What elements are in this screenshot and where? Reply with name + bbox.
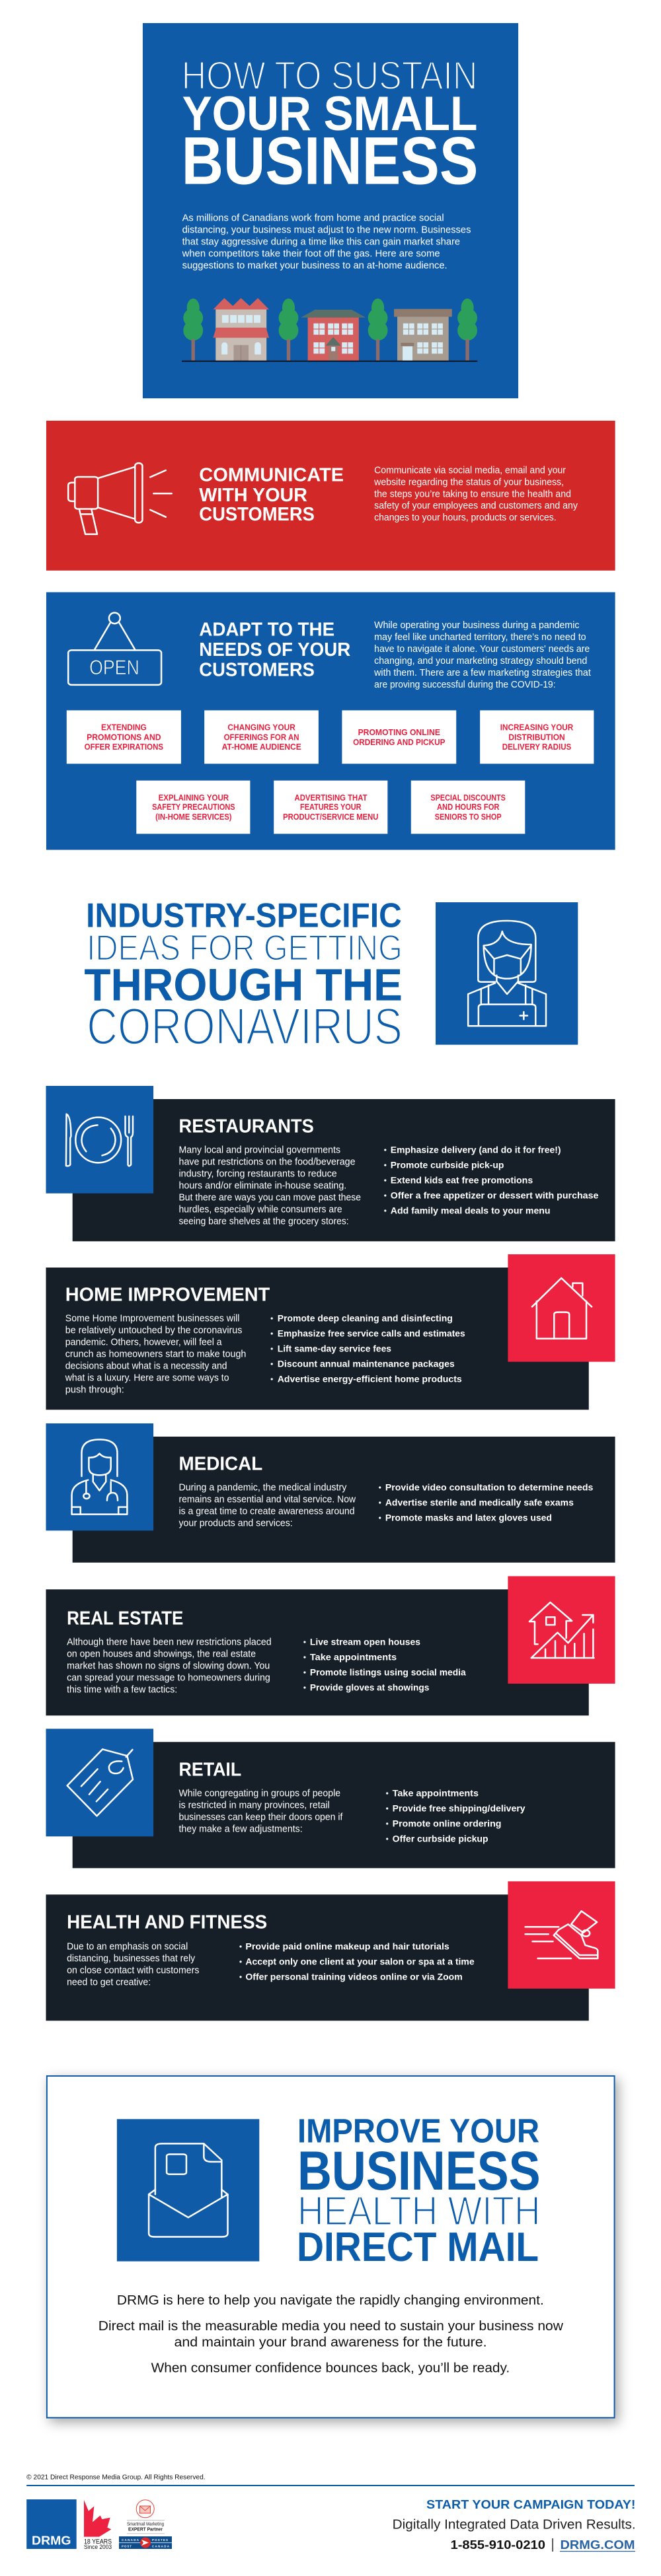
strategy card: extending promotions: EXTENDING [101, 723, 147, 733]
heading: HEALTH AND FITNESS [67, 1912, 267, 1933]
badge: 18 years maple leaf [84, 2500, 112, 2551]
strategy card: online ordering: ORDERING AND PICKUP [353, 738, 445, 747]
heading: BUSINESS [297, 2139, 541, 2201]
strategy card: changing offerings: AT-HOME AUDIENCE [222, 742, 301, 752]
body text: Due to an emphasis on social [67, 1941, 188, 1952]
heading [297, 2112, 541, 2270]
body text: this time with a few tactics: [67, 1684, 177, 1695]
heading: DIRECT MAIL [297, 2225, 539, 2270]
strategy card: changing offerings [204, 710, 319, 764]
intro text [182, 213, 471, 271]
strategy card: distribution radius: DELIVERY RADIUS [502, 742, 571, 752]
bullet list [271, 1313, 465, 1384]
icon: woman wearing mask [436, 902, 578, 1045]
body text: businesses can keep their doors open if [178, 1812, 343, 1822]
body text [373, 620, 591, 690]
body text: remains an essential and vital service. Now [178, 1494, 356, 1505]
heading: industry-specific ideas: CORONAVIRUS [87, 999, 403, 1055]
icon: direct mail envelope [117, 2119, 259, 2262]
heading: industry-specific ideas [84, 896, 403, 1055]
strategy card: advertising: FEATURES YOUR [300, 803, 362, 812]
bullet list [303, 1637, 466, 1692]
title: HOW TO SUSTAIN [182, 53, 477, 98]
closing text [98, 2293, 564, 2375]
heading: ADAPT TO THE [199, 620, 334, 641]
heading: REAL ESTATE [67, 1608, 183, 1629]
badge: smartmail marketing expert [127, 2500, 165, 2534]
heading [199, 620, 350, 680]
bullet list: Provide paid online makeup and hair tutorials [245, 1941, 449, 1951]
body text: they make a few adjustments: [178, 1824, 303, 1834]
badge: smartmail marketing expert: EXPERT Partner [128, 2527, 163, 2532]
bullet list: Provide video consultation to determine needs [385, 1482, 593, 1492]
strategy card: safety precautions: SAFETY PRECAUTIONS [152, 803, 235, 812]
heading: CUSTOMERS [199, 659, 315, 680]
bullet list: Promote masks and latex gloves used [385, 1513, 552, 1522]
bullet list: Provide free shipping/delivery [393, 1803, 525, 1813]
body text: While congregating in groups of people [178, 1788, 340, 1799]
closing text: Direct mail is the measurable media you need to sustain your business now [98, 2319, 564, 2334]
body text: is restricted in many provinces, retail [178, 1800, 330, 1810]
strategy card: online ordering [342, 710, 456, 764]
call to action: 1-855-910-0210 [451, 2538, 545, 2552]
strategy card: extending promotions [67, 710, 181, 764]
footer [26, 2474, 636, 2552]
body text: seeing bare shelves at the grocery stores: [178, 1216, 349, 1227]
strategy card: extending promotions: PROMOTIONS AND [87, 733, 161, 742]
body text: what is a luxury. Here are some ways to [65, 1373, 229, 1383]
body text: changing, and your marketing strategy should bend [374, 656, 587, 666]
icon: price tag [67, 1749, 133, 1816]
bullet list: Extend kids eat free promotions [391, 1175, 533, 1185]
body text: need to get creative: [67, 1977, 151, 1987]
heading [199, 464, 344, 525]
strategy card: distribution radius [480, 710, 594, 764]
badge: canada post: POST [122, 2544, 132, 2548]
bullet list: Lift same-day service fees [278, 1343, 391, 1353]
panel: adapt to the needs of your customers [46, 592, 615, 850]
body text: website regarding the status of your business, [373, 477, 564, 487]
strategy card: extending promotions: OFFER EXPIRATIONS [85, 742, 163, 752]
body text: hours and/or eliminate in-house seating. [178, 1180, 346, 1191]
body text: While operating your business during a pandemic [374, 620, 579, 631]
body text [67, 1941, 199, 1987]
strategy card: seniors: AND HOURS FOR [437, 803, 500, 812]
bullet list [379, 1482, 593, 1522]
title: BUSINESS [182, 123, 478, 199]
body text: But there are ways you can move past these [178, 1192, 361, 1203]
closing text: When consumer confidence bounces back, you’ll be ready. [151, 2361, 510, 2375]
body text: have put restrictions on the food/beverage [178, 1157, 356, 1167]
intro text: that stay aggressive during a time like this can gain market share [182, 237, 460, 248]
body text [178, 1482, 356, 1528]
strategy card: changing offerings: OFFERINGS FOR AN [224, 733, 299, 742]
body text: distancing, businesses that rely [67, 1953, 196, 1964]
body text: crunch as homeowners start to make tough [65, 1349, 246, 1359]
body text: with them. There are a few marketing strategies that [373, 668, 591, 678]
bullet list: Take appointments [310, 1652, 397, 1662]
bullet list: Advertise sterile and medically safe exams [385, 1497, 574, 1507]
body text: push through: [65, 1384, 124, 1395]
body text: decisions about what is a necessity and [65, 1361, 227, 1371]
heading: CUSTOMERS [199, 504, 315, 525]
bullet list: Promote deep cleaning and disinfecting [278, 1313, 453, 1323]
icon: house [532, 1278, 592, 1339]
bullet list: Offer a free appetizer or dessert with purchase [391, 1190, 599, 1200]
body text: safety of your employees and customers and any [374, 501, 578, 511]
panel: restaurants [46, 1086, 615, 1241]
body text: Communicate via social media, email and your [374, 465, 566, 476]
strategy card: seniors: SENIORS TO SHOP [435, 812, 502, 822]
panel: communicate with your customers [46, 421, 615, 571]
strategy card: safety precautions: (IN-HOME SERVICES) [155, 812, 232, 822]
heading: HEALTH WITH [297, 2189, 541, 2235]
copyright: © 2021 Direct Response Media Group. All Rights Reserved. [26, 2474, 206, 2482]
bullet list: Promote listings using social media [310, 1667, 466, 1677]
badge: canada post: CANADA [152, 2544, 170, 2548]
icon: running shoe [525, 1911, 598, 1958]
body text: hurdles, especially while consumers are [178, 1204, 342, 1215]
strategy card: safety precautions: EXPLAINING YOUR [159, 793, 229, 803]
bullet list: Accept only one client at your salon or spa at a time [245, 1956, 475, 1966]
closing text: and maintain your brand awareness for the future. [175, 2336, 487, 2350]
illustration: street of houses and trees [182, 298, 477, 362]
body text: have to navigate it alone. Your customers' needs are [374, 644, 590, 655]
icon: open sign [68, 613, 161, 685]
icon: open sign: OPEN [89, 655, 139, 679]
strategy card: advertising [274, 781, 387, 834]
strategy card: online ordering: PROMOTING ONLINE [358, 728, 440, 737]
body text [67, 1637, 272, 1695]
heading: HOME IMPROVEMENT [65, 1284, 270, 1305]
body text: on close contact with customers [67, 1965, 199, 1976]
bullet list [386, 1788, 525, 1843]
bullet list: Promote online ordering [393, 1818, 501, 1828]
bullet list: Live stream open houses [310, 1637, 420, 1647]
panel: medical [46, 1423, 615, 1563]
strategy card: seniors: SPECIAL DISCOUNTS [430, 793, 506, 803]
body text: be relatively untouched by the coronavirus [65, 1325, 242, 1336]
strategy card: changing offerings: CHANGING YOUR [227, 723, 295, 733]
strategy card: advertising: ADVERTISING THAT [295, 793, 368, 803]
panel: improve your business health with direct mail [47, 2076, 615, 2417]
body text: changes to your hours, products or services. [374, 513, 557, 523]
call to action: Digitally Integrated Data Driven Results. [393, 2518, 636, 2532]
panel: health and fitness [46, 1881, 615, 2021]
logo: DRMG: DRMG [32, 2534, 71, 2547]
panel: real estate [46, 1576, 615, 1715]
body text: Although there have been new restrictions placed [67, 1637, 272, 1647]
call to action [393, 2497, 636, 2552]
heading: NEEDS OF YOUR [199, 639, 350, 661]
body text [178, 1788, 343, 1834]
heading: COMMUNICATE [199, 464, 344, 485]
badge: 18 years maple leaf: Since 2003 [84, 2544, 112, 2551]
call to action: DRMG.COM [561, 2538, 635, 2552]
title [182, 53, 478, 199]
call to action: START YOUR CAMPAIGN TODAY! [426, 2497, 636, 2511]
bullet list [384, 1145, 599, 1215]
icon: doctor [72, 1439, 127, 1515]
strategy card: distribution radius: DISTRIBUTION [508, 733, 565, 742]
body text: the steps you’re taking to ensure the health and [374, 489, 571, 499]
bullet list: Offer curbside pickup [393, 1834, 488, 1843]
logo: DRMG [26, 2499, 77, 2549]
bullet list [239, 1941, 475, 1982]
heading: industry-specific ideas: THROUGH THE [84, 959, 403, 1010]
bullet list: Advertise energy-efficient home products [278, 1374, 462, 1384]
body text [373, 465, 578, 523]
body text: During a pandemic, the medical industry [178, 1482, 347, 1493]
bullet list: Promote curbside pick-up [391, 1160, 504, 1170]
closing text: DRMG is here to help you navigate the rapidly changing environment. [117, 2293, 544, 2308]
heading: RESTAURANTS [178, 1116, 314, 1137]
panel: home improvement [46, 1254, 615, 1410]
body text: is a great time to create awareness around [178, 1506, 355, 1517]
badge: canada post: CANADA [122, 2538, 139, 2542]
panel: hero [143, 23, 518, 398]
intro text: distancing, your business must adjust to the new norm. Businesses [182, 225, 471, 235]
badge: canada post [119, 2536, 172, 2549]
bullet list: Offer personal training videos online or via Zoom [245, 1972, 463, 1982]
body text: industry, forcing restaurants to reduce [178, 1168, 337, 1179]
body text: may feel like uncharted territory, there’s no need to [374, 632, 586, 643]
body text: your products and services: [178, 1518, 293, 1528]
bullet list: Add family meal deals to your menu [391, 1205, 551, 1215]
heading: industry-specific ideas: IDEAS FOR GETTING [87, 928, 403, 968]
strategy card: safety precautions [136, 781, 250, 834]
heading: MEDICAL [178, 1453, 262, 1474]
body text: pandemic. Others, however, will feel a [65, 1337, 222, 1347]
body text [178, 1145, 361, 1227]
bullet list: Provide gloves at showings [310, 1682, 429, 1692]
icon: house with rising chart [529, 1602, 594, 1658]
heading: RETAIL [178, 1760, 241, 1781]
heading: IMPROVE YOUR [297, 2112, 539, 2149]
badge: 18 years maple leaf: 18 YEARS [84, 2538, 112, 2546]
strategy card: seniors [411, 781, 525, 834]
icon: megaphone [68, 463, 172, 534]
body text: Many local and provincial governments [178, 1145, 340, 1155]
body text: on open houses and showings, the real estate [67, 1649, 256, 1659]
heading: industry-specific ideas: INDUSTRY-SPECIFIC [86, 896, 402, 934]
badge: smartmail marketing expert: Smartmail Marketing [127, 2522, 164, 2527]
strategy card: distribution radius: INCREASING YOUR [500, 723, 573, 733]
bullet list: Emphasize free service calls and estimates [278, 1328, 465, 1338]
strategy card: advertising: PRODUCT/SERVICE MENU [283, 812, 378, 822]
bullet list: Take appointments [393, 1788, 479, 1798]
body text: can spread your message to homeowners during [67, 1672, 270, 1683]
body text: are proving successful during the COVID-19: [374, 680, 556, 690]
panel: retail [46, 1729, 615, 1868]
heading: WITH YOUR [199, 485, 307, 506]
badge: canada post: POSTES [152, 2538, 168, 2542]
intro text: when competitors take their foot off the gas. Here are some [182, 249, 440, 260]
bullet list: Emphasize delivery (and do it for free!) [391, 1145, 561, 1155]
title: YOUR SMALL [182, 86, 477, 141]
body text: market has shown no signs of slowing down. You [67, 1661, 270, 1671]
body text: Some Home Improvement businesses will [65, 1313, 239, 1324]
icon: plate and cutlery [66, 1114, 133, 1166]
intro text: suggestions to market your business to an at-home audience. [182, 261, 447, 271]
bullet list: Discount annual maintenance packages [278, 1359, 455, 1369]
body text [65, 1313, 246, 1395]
intro text: As millions of Canadians work from home and practice social [182, 213, 444, 223]
